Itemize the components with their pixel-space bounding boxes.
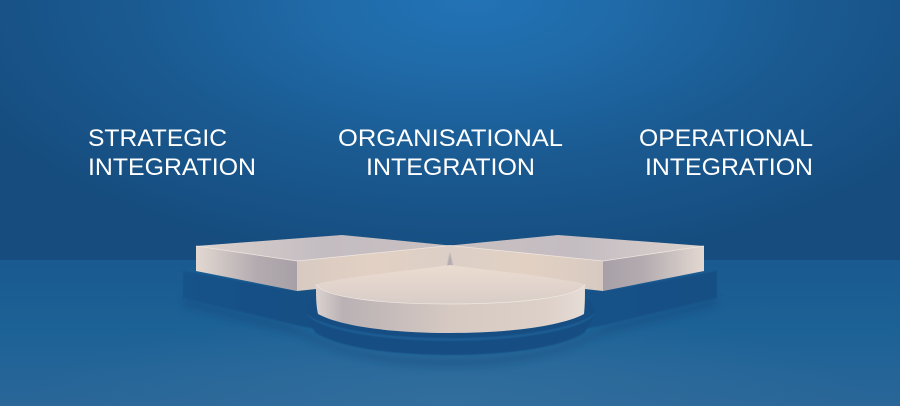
heading: organisational integration: [338, 125, 563, 181]
heading: operational integration: INTEGRATION: [645, 154, 813, 181]
seam shadow between blocks: [447, 252, 453, 266]
block inner face: [297, 246, 450, 291]
heading: strategic integration: [88, 125, 256, 181]
floor: [0, 260, 900, 406]
block front face: [196, 246, 297, 291]
podium shadow: [183, 298, 717, 366]
block: organisational (centre half disc): [316, 265, 585, 333]
background wall: [0, 0, 900, 262]
block: strategic (left): [196, 235, 450, 291]
heading: organisational integration: INTEGRATION: [366, 154, 535, 181]
block top face: [450, 235, 704, 261]
disc side: [316, 284, 585, 333]
block inner face: [450, 246, 603, 291]
base: round front: [306, 300, 595, 355]
disc top: [316, 265, 585, 304]
base: left: [183, 271, 320, 330]
heading: operational integration: OPERATIONAL: [639, 125, 813, 152]
block top face: [196, 235, 450, 261]
heading: strategic integration: INTEGRATION: [88, 154, 256, 181]
block front face: [603, 246, 704, 291]
base: right: [580, 271, 717, 330]
heading: organisational integration: ORGANISATIONAL: [338, 125, 563, 152]
heading: strategic integration: STRATEGIC: [88, 125, 227, 152]
heading: operational integration: [639, 125, 813, 181]
podium base: [183, 271, 717, 355]
block: operational (right): [450, 235, 704, 291]
